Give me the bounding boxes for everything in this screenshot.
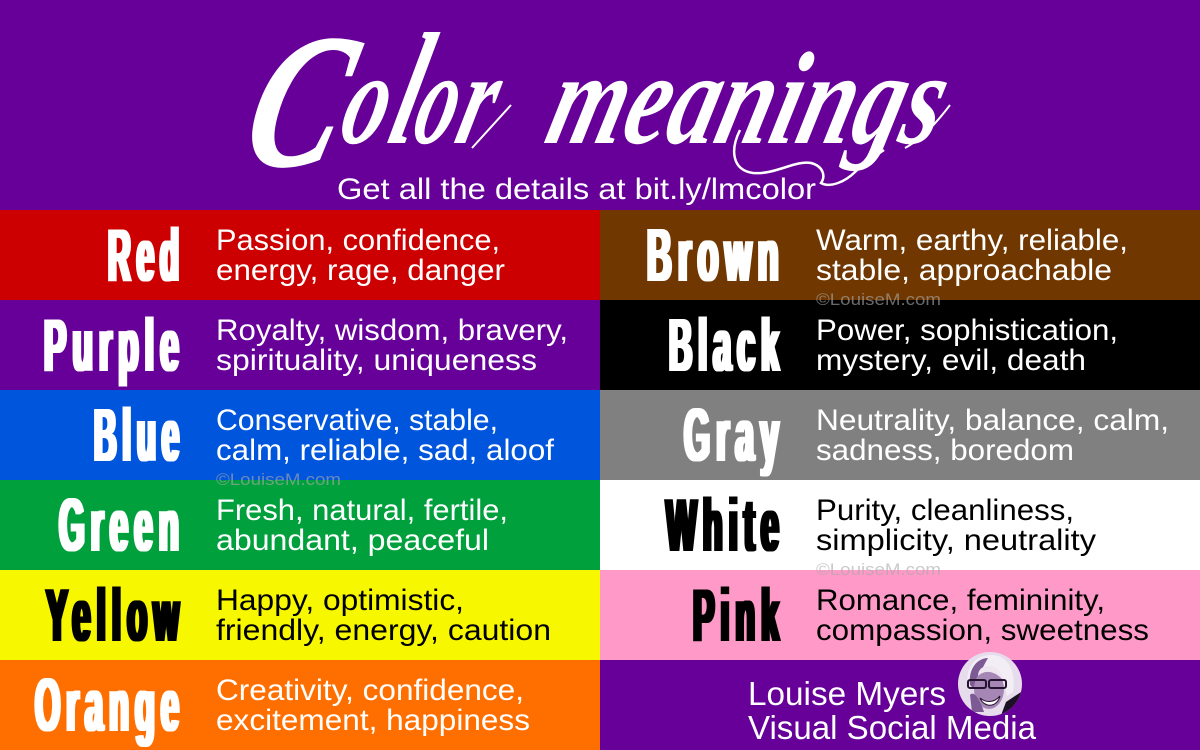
panel: white: White — [666, 483, 785, 567]
panel: brown — [600, 210, 1200, 300]
meanings: yellow: friendly, energy, caution — [216, 614, 551, 647]
credit: author name: Visual Social Media — [748, 709, 1037, 746]
panel: gray: Gray — [684, 393, 785, 477]
panel: yellow: Yellow — [46, 573, 185, 657]
meanings: green: Fresh, natural, fertile, — [216, 494, 508, 527]
title: l — [376, 2, 449, 178]
panel: orange: Orange — [35, 663, 185, 747]
panel: green — [0, 480, 600, 570]
panel: green: Green — [59, 483, 185, 567]
meanings: black: mystery, evil, death — [816, 344, 1086, 377]
panel: gray — [600, 390, 1200, 480]
panel: purple — [0, 300, 600, 390]
panel: red — [0, 210, 600, 300]
meanings: orange: excitement, happiness — [216, 704, 530, 737]
panel: blue — [0, 390, 600, 480]
meanings: gray: sadness, boredom — [816, 434, 1074, 467]
meanings: white: simplicity, neutrality — [816, 524, 1096, 557]
meanings: orange: Creativity, confidence, — [216, 674, 524, 707]
watermark: white/pink: ©LouiseM.com — [816, 560, 941, 579]
meanings: green: abundant, peaceful — [216, 524, 489, 557]
title: o — [328, 26, 411, 172]
panel: black: Black — [669, 303, 785, 387]
meanings: blue: calm, reliable, sad, aloof — [216, 434, 555, 467]
meanings: red: energy, rage, danger — [216, 254, 505, 287]
meanings: pink: compassion, sweetness — [816, 614, 1149, 647]
title: C — [227, 0, 377, 206]
credit: author name: Louise Myers — [748, 675, 946, 712]
panel: pink: Pink — [693, 573, 785, 657]
meanings: blue: Conservative, stable, — [216, 404, 498, 437]
meanings: brown: stable, approachable — [816, 254, 1112, 287]
subtitle: Get all the details at bit.ly/lmcolor — [337, 173, 816, 206]
meanings: purple: spirituality, uniqueness — [216, 344, 537, 377]
title — [227, 0, 965, 206]
meanings: black: Power, sophistication, — [816, 314, 1118, 347]
panel: pink — [600, 570, 1200, 660]
meanings: white: Purity, cleanliness, — [816, 494, 1074, 527]
meanings: purple: Royalty, wisdom, bravery, — [216, 314, 568, 347]
title: r — [444, 26, 518, 172]
meanings: red: Passion, confidence, — [216, 224, 500, 257]
meanings: brown: Warm, earthy, reliable, — [816, 224, 1128, 257]
title: meanings — [534, 26, 965, 172]
panel: purple: Purple — [44, 303, 185, 387]
watermark: brown/black: ©LouiseM.com — [816, 290, 941, 309]
icon: author portrait — [958, 652, 1024, 718]
panel: white — [600, 480, 1200, 570]
title: o — [401, 26, 480, 172]
meanings: pink: Romance, femininity, — [816, 584, 1105, 617]
panel: orange — [0, 660, 600, 750]
panel: brown: Brown — [647, 213, 785, 297]
watermark: blue/green: ©LouiseM.com — [216, 470, 341, 489]
meanings: yellow: Happy, optimistic, — [216, 584, 464, 617]
panel: yellow — [0, 570, 600, 660]
panel: black — [600, 300, 1200, 390]
meanings: gray: Neutrality, balance, calm, — [816, 404, 1169, 437]
panel: blue: Blue — [94, 393, 185, 477]
panel: red: Red — [108, 213, 185, 297]
